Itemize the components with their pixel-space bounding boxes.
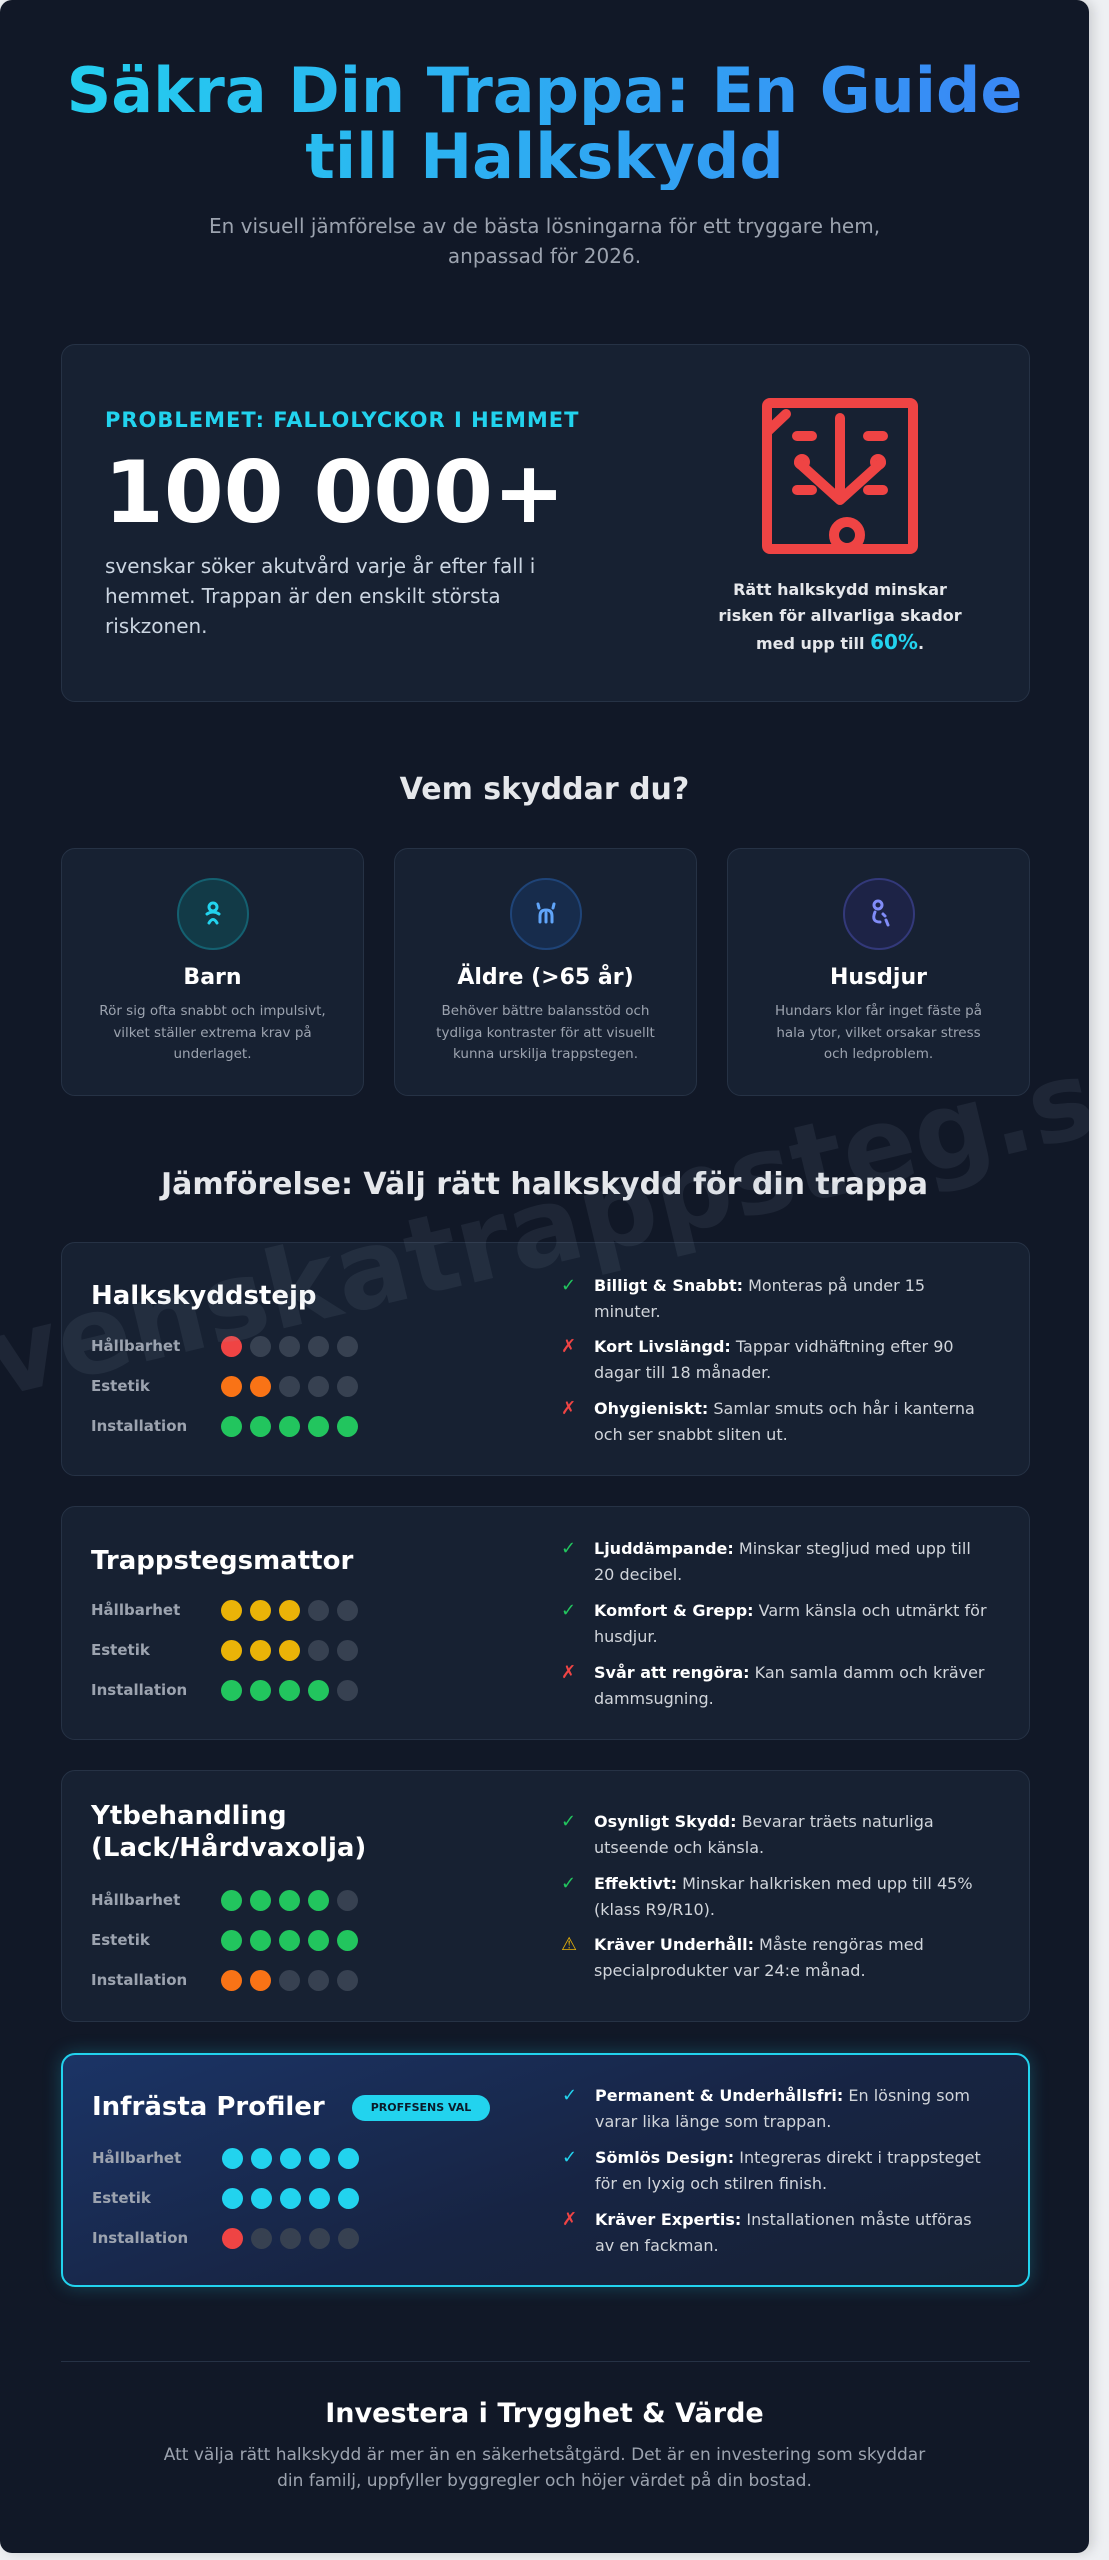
- title: Äldre (>65 år): [457, 965, 634, 990]
- icon: stair fall warning: [762, 398, 918, 554]
- text: vilket ställer extrema krav på: [113, 1024, 312, 1040]
- footer text: din familj, uppfyller byggregler och höjer värdet på din bostad.: [277, 2471, 812, 2491]
- panel: Halkskyddstejp: [61, 1242, 1030, 1476]
- footer text: Att välja rätt halkskydd är mer än en säkerhetsåtgärd. Det är en investering som skyddar: [164, 2445, 925, 2465]
- pro: Ljuddämpande: Minskar stegljud med upp till 20 decibel.: [594, 1539, 971, 1584]
- panel: Halkskyddstejp: ✓: [561, 1275, 576, 1296]
- panel: Ytbehandling: [61, 1770, 1030, 2022]
- text: Behöver bättre balansstöd och: [442, 1003, 649, 1019]
- panel: Trappstegsmattor: ✗: [561, 1662, 576, 1683]
- panel: Infrästa Profiler (highlighted): ✓: [562, 2147, 577, 2168]
- subtitle: anpassad för 2026.: [448, 244, 641, 268]
- title: Säkra Din Trappa: En Guide: [67, 54, 1022, 127]
- text: Hundars klor får inget fäste på: [775, 1003, 982, 1019]
- text: och ledproblem.: [824, 1046, 933, 1062]
- footer text: [164, 2445, 926, 2491]
- rating: Estetik: [91, 1376, 358, 1397]
- pro: Sömlös Design: Integreras direkt i trappsteget för en lyxig och stilren finish.: [595, 2148, 981, 2192]
- text: underlaget.: [173, 1046, 252, 1062]
- pro: Permanent & Underhållsfri: En lösning som varar lika länge som trappan.: [595, 2086, 970, 2130]
- text: Rör sig ofta snabbt och impulsivt,: [99, 1003, 326, 1019]
- footer heading: Investera i Trygghet & Värde: [325, 2398, 764, 2429]
- rating: Hållbarhet: Hållbarhet: [91, 1891, 180, 1909]
- warning: Kräver Underhåll: Måste rengöras med specialprodukter var 24:e månad.: [594, 1935, 924, 1980]
- rating: Installation: Installation: [92, 2229, 188, 2247]
- rating: Installation: [91, 1970, 358, 1991]
- subtitle: [209, 214, 880, 268]
- rating: Hållbarhet: Hållbarhet: [91, 1601, 180, 1619]
- rating: Estetik: Estetik: [91, 1641, 150, 1659]
- panel: Ytbehandling: ✓: [561, 1811, 576, 1832]
- panel: Trappstegsmattor: [61, 1506, 1030, 1740]
- rating: Hållbarhet: Hållbarhet: [92, 2149, 181, 2167]
- big number: 100 000+: [104, 443, 565, 543]
- rating: Estetik: Estetik: [92, 2189, 151, 2207]
- icon: child: [177, 878, 249, 950]
- panel: Infrästa Profiler (highlighted): [61, 2053, 1030, 2287]
- panel: Äldre: [394, 848, 697, 1096]
- rating: Installation: Installation: [91, 1971, 187, 1989]
- rating: Hållbarhet: Hållbarhet: [91, 1337, 180, 1355]
- rating: Installation: Installation: [91, 1417, 187, 1435]
- panel: Barn: [61, 848, 364, 1096]
- subtitle: En visuell jämförelse av de bästa lösningarna för ett tryggare hem,: [209, 214, 880, 238]
- caption: Rätt halkskydd minskar risken för allvarliga skador med upp till 60%.: [718, 580, 962, 654]
- badge: [352, 2095, 490, 2121]
- panel: Infrästa Profiler (highlighted): ✓: [562, 2085, 577, 2106]
- con: Kräver Expertis: Installationen måste utföras av en fackman.: [595, 2210, 972, 2254]
- product title: (Lack/Hårdvaxolja): [91, 1833, 366, 1863]
- rating: Estetik: Estetik: [91, 1931, 150, 1949]
- rating: Estetik: [92, 2188, 359, 2209]
- pro: Osynligt Skydd: Bevarar träets naturliga utseende och känsla.: [594, 1812, 934, 1856]
- rating: Installation: [91, 1680, 358, 1701]
- con: Ohygieniskt: Samlar smuts och hår i kanterna och ser snabbt sliten ut.: [594, 1399, 975, 1444]
- panel: Ytbehandling: ⚠: [561, 1934, 577, 1955]
- title: Barn: [183, 965, 242, 990]
- pro: Billigt & Snabbt: Monteras på under 15 minuter.: [594, 1276, 925, 1320]
- text: [775, 1003, 982, 1062]
- panel: Trappstegsmattor: ✓: [561, 1538, 576, 1559]
- description: svenskar söker akutvård varje år efter fall i hemmet. Trappan är den enskilt största riskzonen.: [105, 554, 535, 638]
- heading: who: Vem skyddar du?: [400, 772, 689, 807]
- text: tydliga kontraster för att visuellt: [436, 1024, 655, 1040]
- con: Kort Livslängd: Tappar vidhäftning efter 90 dagar till 18 månader.: [594, 1337, 954, 1382]
- label: problem: PROBLEMET: FALLOLYCKOR I HEMMET: [105, 408, 579, 432]
- text: hala ytor, vilket orsakar stress: [776, 1024, 981, 1040]
- icon: pet: [843, 878, 915, 950]
- rating: Estetik: [91, 1640, 358, 1661]
- title: Husdjur: [830, 965, 927, 990]
- panel: problem statistic: [61, 344, 1030, 702]
- rating: Installation: Installation: [91, 1681, 187, 1699]
- product title: Infrästa Profiler: [92, 2092, 325, 2122]
- title: [0, 58, 1089, 190]
- panel: Halkskyddstejp: ✗: [561, 1336, 576, 1357]
- rating: Hållbarhet: [91, 1600, 358, 1621]
- panel: Trappstegsmattor: ✓: [561, 1600, 576, 1621]
- product title: [90, 1801, 366, 1863]
- badge: PROFFSENS VAL: [371, 2101, 471, 2114]
- panel: Infrästa Profiler (highlighted): ✗: [562, 2209, 577, 2230]
- rating: Installation: [91, 1416, 358, 1437]
- text: [436, 1003, 655, 1062]
- rating: Hållbarhet: [91, 1336, 358, 1357]
- text: [99, 1003, 326, 1062]
- title: till Halkskydd: [305, 120, 784, 193]
- product title: Halkskyddstejp: [91, 1281, 317, 1311]
- pro: Effektivt: Minskar halkrisken med upp till 45% (klass R9/R10).: [594, 1874, 973, 1918]
- con: Svår att rengöra: Kan samla damm och kräver dammsugning.: [594, 1663, 985, 1708]
- panel: Halkskyddstejp: ✗: [561, 1398, 576, 1419]
- icon: elderly: [510, 878, 582, 950]
- rating: Hållbarhet: [92, 2148, 359, 2169]
- rating: Estetik: [91, 1930, 358, 1951]
- panel: Ytbehandling: ✓: [561, 1873, 576, 1894]
- pro: Komfort & Grepp: Varm känsla och utmärkt för husdjur.: [594, 1601, 987, 1646]
- product title: Trappstegsmattor: [91, 1546, 353, 1576]
- rating: Installation: [92, 2228, 359, 2249]
- rating: Estetik: Estetik: [91, 1377, 150, 1395]
- text: kunna urskilja trappstegen.: [453, 1046, 638, 1062]
- product title: Ytbehandling: [91, 1801, 287, 1831]
- rating: Hållbarhet: [91, 1890, 358, 1911]
- heading: comparison: Jämförelse: Välj rätt halkskydd för din trappa: [161, 1167, 928, 1202]
- panel: Husdjur: [727, 848, 1030, 1096]
